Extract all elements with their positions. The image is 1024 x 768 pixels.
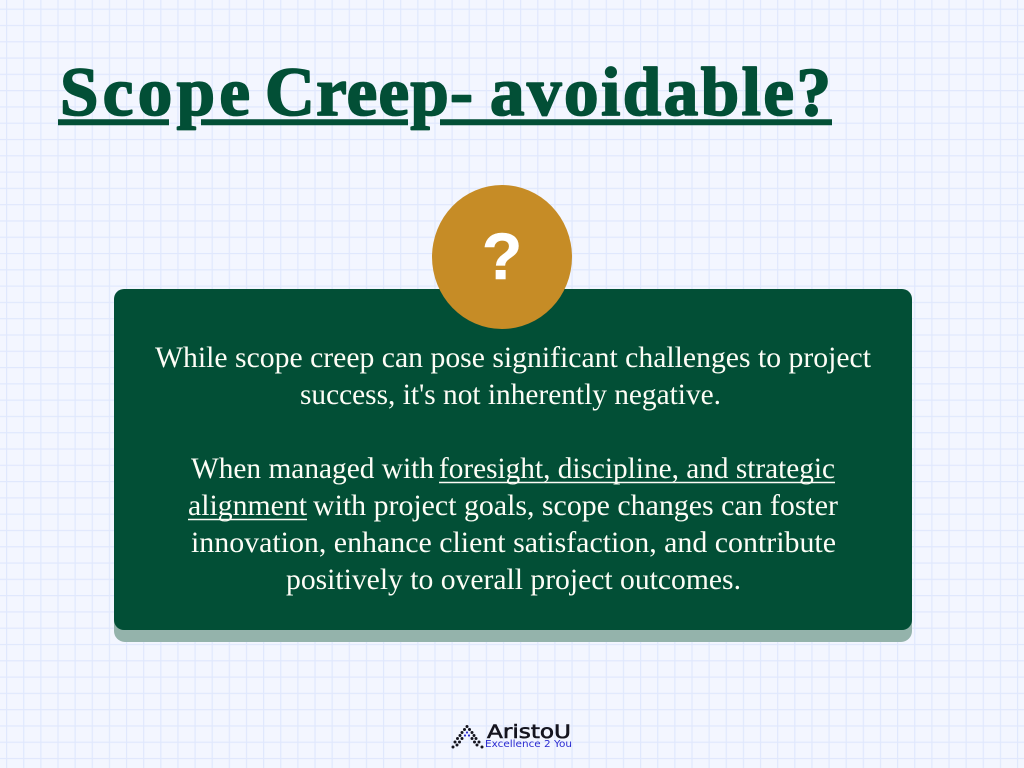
title [58, 54, 832, 130]
icon: question mark badge [432, 185, 572, 329]
title: avoidable? [490, 54, 831, 130]
title: Creep- [265, 54, 473, 130]
panel: answer card [114, 289, 912, 642]
logo tagline: Excellence 2 You [485, 739, 572, 750]
title: Scope [60, 54, 250, 130]
card shadow [114, 301, 912, 642]
text block: first paragraph: success, it's not inherently negative. [300, 378, 721, 411]
icon: question mark badge: ? [482, 219, 522, 293]
text block: first paragraph [155, 341, 872, 411]
logo: AristoU [452, 721, 572, 750]
text block: second paragraph: When managed with [191, 452, 434, 485]
card body [114, 289, 912, 630]
text block: second paragraph: positively to overall project outcomes. [286, 563, 741, 596]
text block: second paragraph [188, 452, 838, 596]
logo wordmark: AristoU [487, 721, 571, 743]
text block: second paragraph: foresight, discipline, and strategic [439, 452, 835, 485]
text block: first paragraph: While scope creep can pose significant challenges to project [155, 341, 872, 374]
text block: second paragraph: innovation, enhance client satisfaction, and contribute [191, 526, 836, 559]
text block: second paragraph: alignment [188, 489, 308, 522]
icon: dotted triangle [452, 725, 484, 748]
text block: second paragraph: with project goals, scope changes can foster [313, 489, 838, 522]
